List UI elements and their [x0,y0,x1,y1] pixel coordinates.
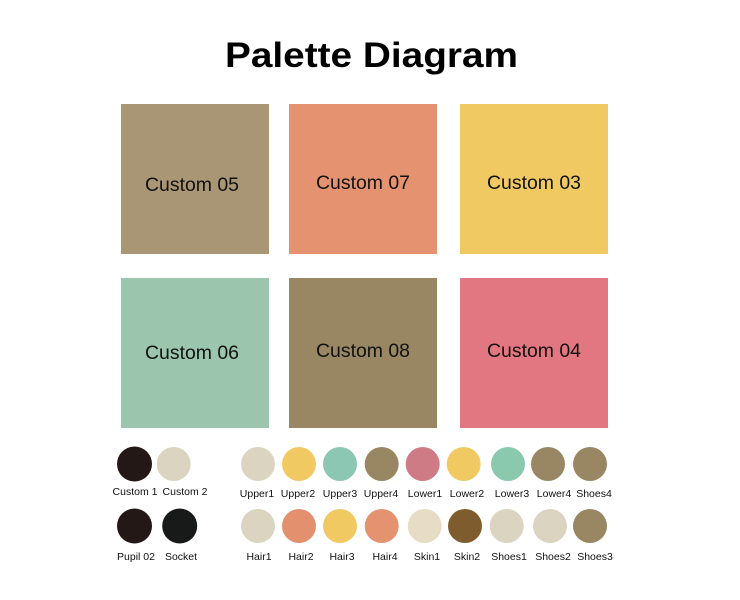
swatch: Upper1 [240,447,275,500]
title: Palette Diagram [225,36,518,75]
swatch: Custom 1 [113,446,158,498]
swatch: Hair4 [365,509,399,563]
swatch: Lower4 [531,447,571,500]
swatch: Hair2: Hair2 [288,551,314,563]
swatch: Custom 2: Custom 2 [163,486,208,498]
swatch: Shoes4 [573,447,612,500]
swatch: Lower4: Lower4 [537,488,571,500]
swatch: Upper2 [281,447,316,500]
swatch: Socket [162,508,197,563]
swatch: Upper4: Upper4 [364,488,398,500]
swatch: Shoes2 [533,509,571,563]
swatch: Shoes1: Shoes1 [491,551,527,563]
swatch: Lower2 [447,447,484,500]
swatch: Hair2 [282,509,316,563]
swatch: Hair4: Hair4 [372,551,398,563]
swatch: Lower2: Lower2 [450,488,484,500]
swatch: Upper4 [364,447,399,500]
swatch: Custom 03: Custom 03 [487,173,581,194]
swatch: Custom 2 [157,447,208,498]
swatch: Pupil 02: Pupil 02 [117,551,155,563]
swatch: Lower1 [406,447,442,500]
swatch: Skin1: Skin1 [414,551,440,563]
swatch: Custom 05: Custom 05 [145,175,239,196]
swatch: Lower1: Lower1 [408,488,442,500]
swatch: Shoes4: Shoes4 [576,488,612,500]
swatch: Upper3: Upper3 [323,488,357,500]
swatch: Hair1: Hair1 [246,551,272,563]
swatch: Upper3 [323,447,357,500]
swatch: Custom 07 [289,104,437,254]
swatch: Shoes3: Shoes3 [577,551,613,563]
swatch: Lower3 [491,447,529,500]
swatch: Custom 03 [460,104,608,254]
swatch: Custom 1: Custom 1 [113,486,158,498]
swatch: Custom 08: Custom 08 [316,341,410,362]
swatch: Hair3 [323,509,357,563]
swatch: Custom 07: Custom 07 [316,173,410,194]
swatch: Skin2: Skin2 [454,551,480,563]
swatch: Skin1 [408,509,442,563]
swatch: Custom 04 [460,278,608,428]
swatch: Lower3: Lower3 [495,488,529,500]
swatch: Pupil 02 [117,508,155,563]
swatch: Custom 06: Custom 06 [145,343,239,364]
swatch: Socket: Socket [165,551,197,563]
swatch: Custom 06 [121,278,269,428]
swatch: Hair3: Hair3 [329,551,355,563]
swatch: Shoes1 [490,509,527,563]
swatch: Custom 04: Custom 04 [487,341,581,362]
swatch: Upper2: Upper2 [281,488,315,500]
panel: large swatches [121,104,608,428]
swatch: Hair1 [241,509,275,563]
swatch: Upper1: Upper1 [240,488,274,500]
panel: small swatches [113,446,613,563]
swatch: Custom 05 [121,104,269,254]
swatch: Custom 08 [289,278,437,428]
swatch: Shoes3 [573,509,613,563]
swatch: Shoes2: Shoes2 [535,551,571,563]
swatch: Skin2 [448,509,482,563]
